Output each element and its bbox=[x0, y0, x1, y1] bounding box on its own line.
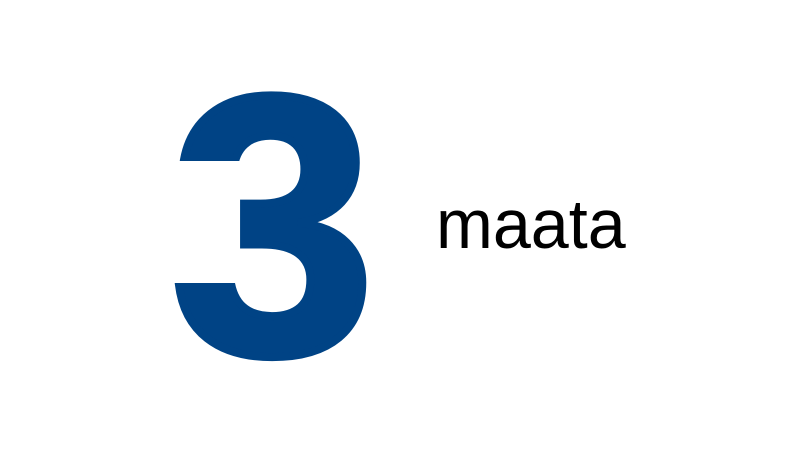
big number 3: 3 bbox=[170, 20, 376, 432]
label: maata: maata bbox=[436, 185, 625, 263]
